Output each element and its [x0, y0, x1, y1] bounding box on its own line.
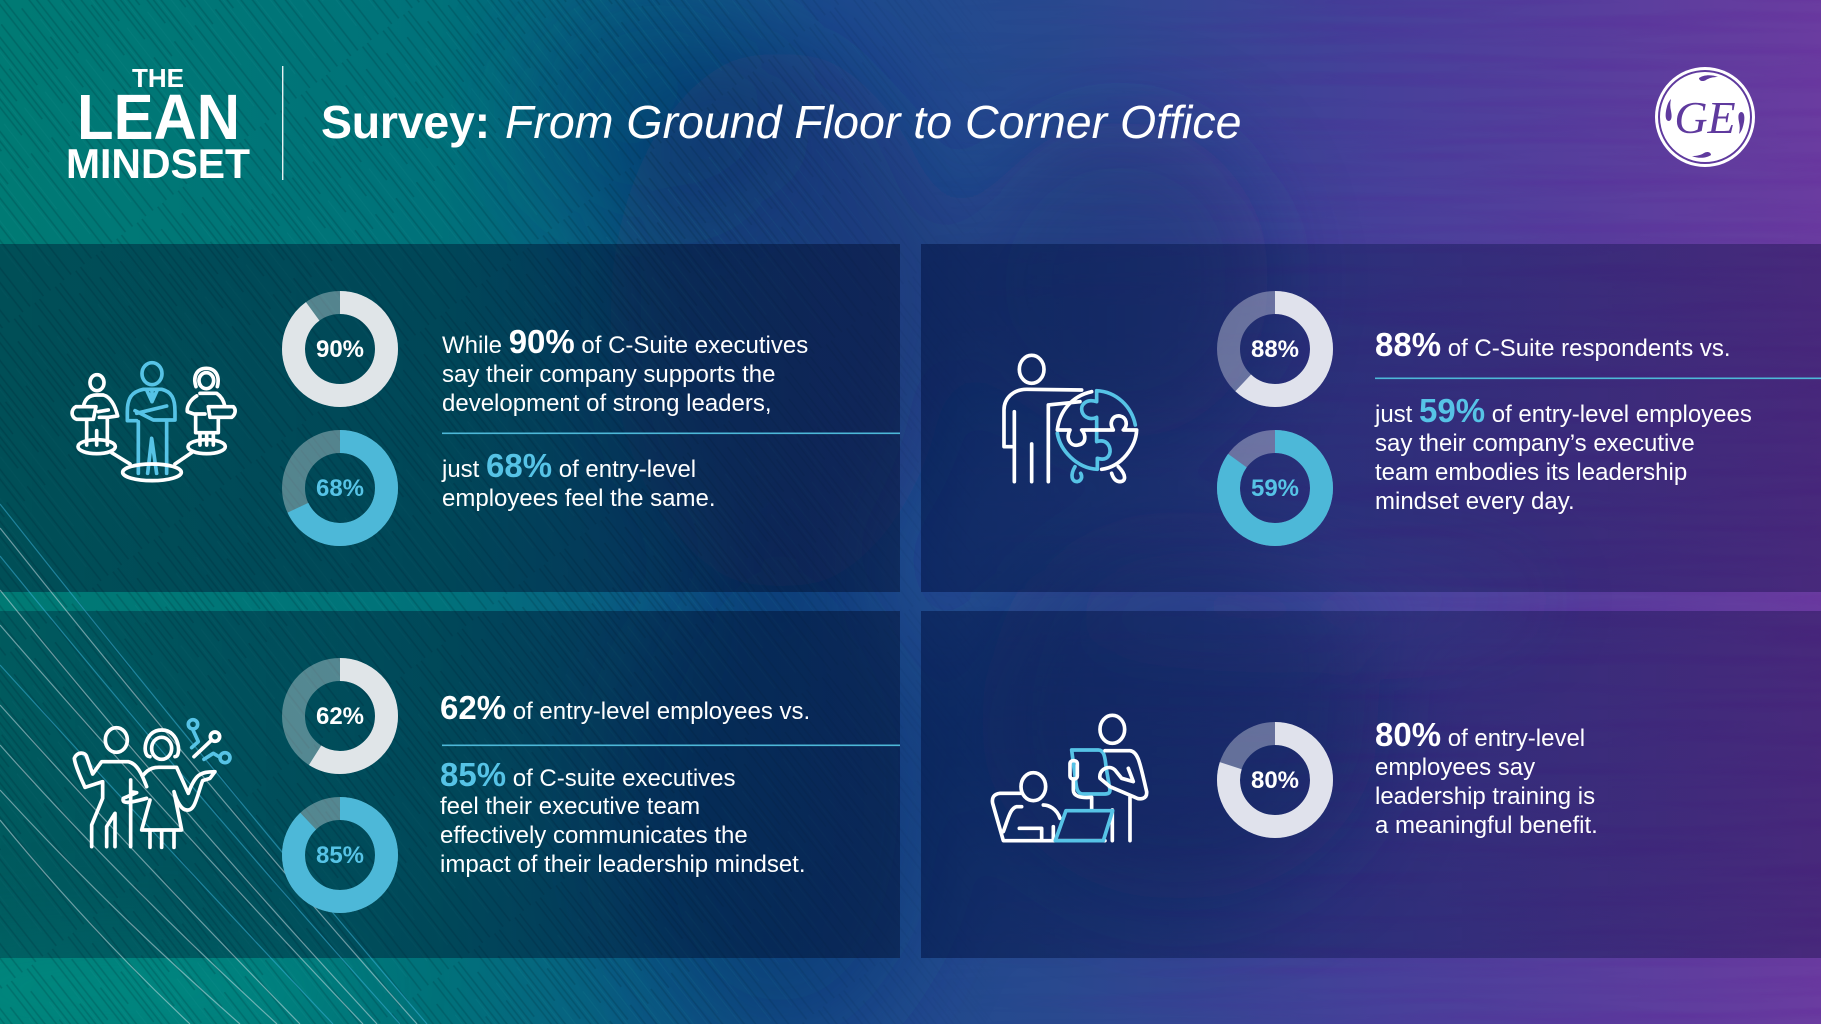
donut: 68% [294, 442, 386, 534]
text block: bottom right: 80% of entry-level [1375, 716, 1585, 753]
text block: top right upper: 88% of C-Suite respondents vs. [1375, 326, 1731, 363]
text line: employees feel the same. [442, 485, 715, 512]
logo: The Lean Mindset: LEAN [77, 81, 240, 153]
donut: 80%: 80% [1251, 767, 1299, 794]
donut: 62%: 62% [316, 703, 364, 730]
donut: 90% [294, 302, 386, 396]
text line: feel their executive team [440, 793, 700, 820]
icon: three leaders on connected platforms [72, 363, 235, 481]
icon: person with puzzle globe [1004, 355, 1137, 482]
donut: 88%: 88% [1251, 336, 1299, 363]
logo: The Lean Mindset: THE [132, 63, 184, 93]
panel: top left [0, 244, 900, 592]
text block: bottom left upper: 62% of entry-level employees vs. [440, 689, 810, 726]
title: Survey: [321, 96, 503, 148]
text line: mindset every day. [1375, 488, 1575, 515]
donut: 88% [1228, 302, 1322, 396]
text line: a meaningful benefit. [1375, 812, 1598, 839]
donut: 68%: 68% [316, 475, 364, 502]
text line: say their company supports the [442, 361, 776, 388]
donut: 80% [1228, 734, 1322, 826]
text line: leadership training is [1375, 783, 1595, 810]
donut: 90%: 90% [316, 336, 364, 363]
panel: bottom left [0, 611, 900, 958]
text line: say their company’s executive [1375, 430, 1695, 457]
donut: 59% [1228, 442, 1322, 534]
text block: top left lower: just 68% of entry-level [441, 447, 696, 484]
donut: 62% [294, 670, 386, 762]
title: From Ground Floor to Corner Office [505, 96, 1242, 148]
text line: effectively communicates the [440, 822, 748, 849]
text line: impact of their leadership mindset. [440, 851, 806, 878]
donut: 59%: 59% [1251, 475, 1299, 502]
logo: The Lean Mindset: MINDSET [66, 140, 250, 187]
text line: employees say [1375, 754, 1535, 781]
donut: 85%: 85% [316, 842, 364, 869]
panel: top right [921, 244, 1821, 592]
text line: team embodies its leadership [1375, 459, 1687, 486]
donut: 85% [294, 808, 386, 902]
logo: The Lean Mindset [66, 63, 250, 187]
panel: bottom right [921, 611, 1821, 958]
text block: top left upper: While 90% of C-Suite executives [442, 323, 808, 360]
icon: GE logo [1655, 67, 1755, 167]
icon: two colleagues with connected ideas [74, 720, 230, 847]
diagonal line pattern [0, 504, 427, 1024]
text block: top right lower: just 59% of entry-level employees [1374, 392, 1752, 429]
icon: GE logo: GE [1674, 92, 1736, 143]
text block: bottom left lower: 85% of C-suite executives [440, 756, 736, 793]
icon: mentor with tablet and seated employee at laptop [992, 715, 1147, 841]
header divider [282, 66, 283, 180]
text line: development of strong leaders, [442, 390, 772, 417]
